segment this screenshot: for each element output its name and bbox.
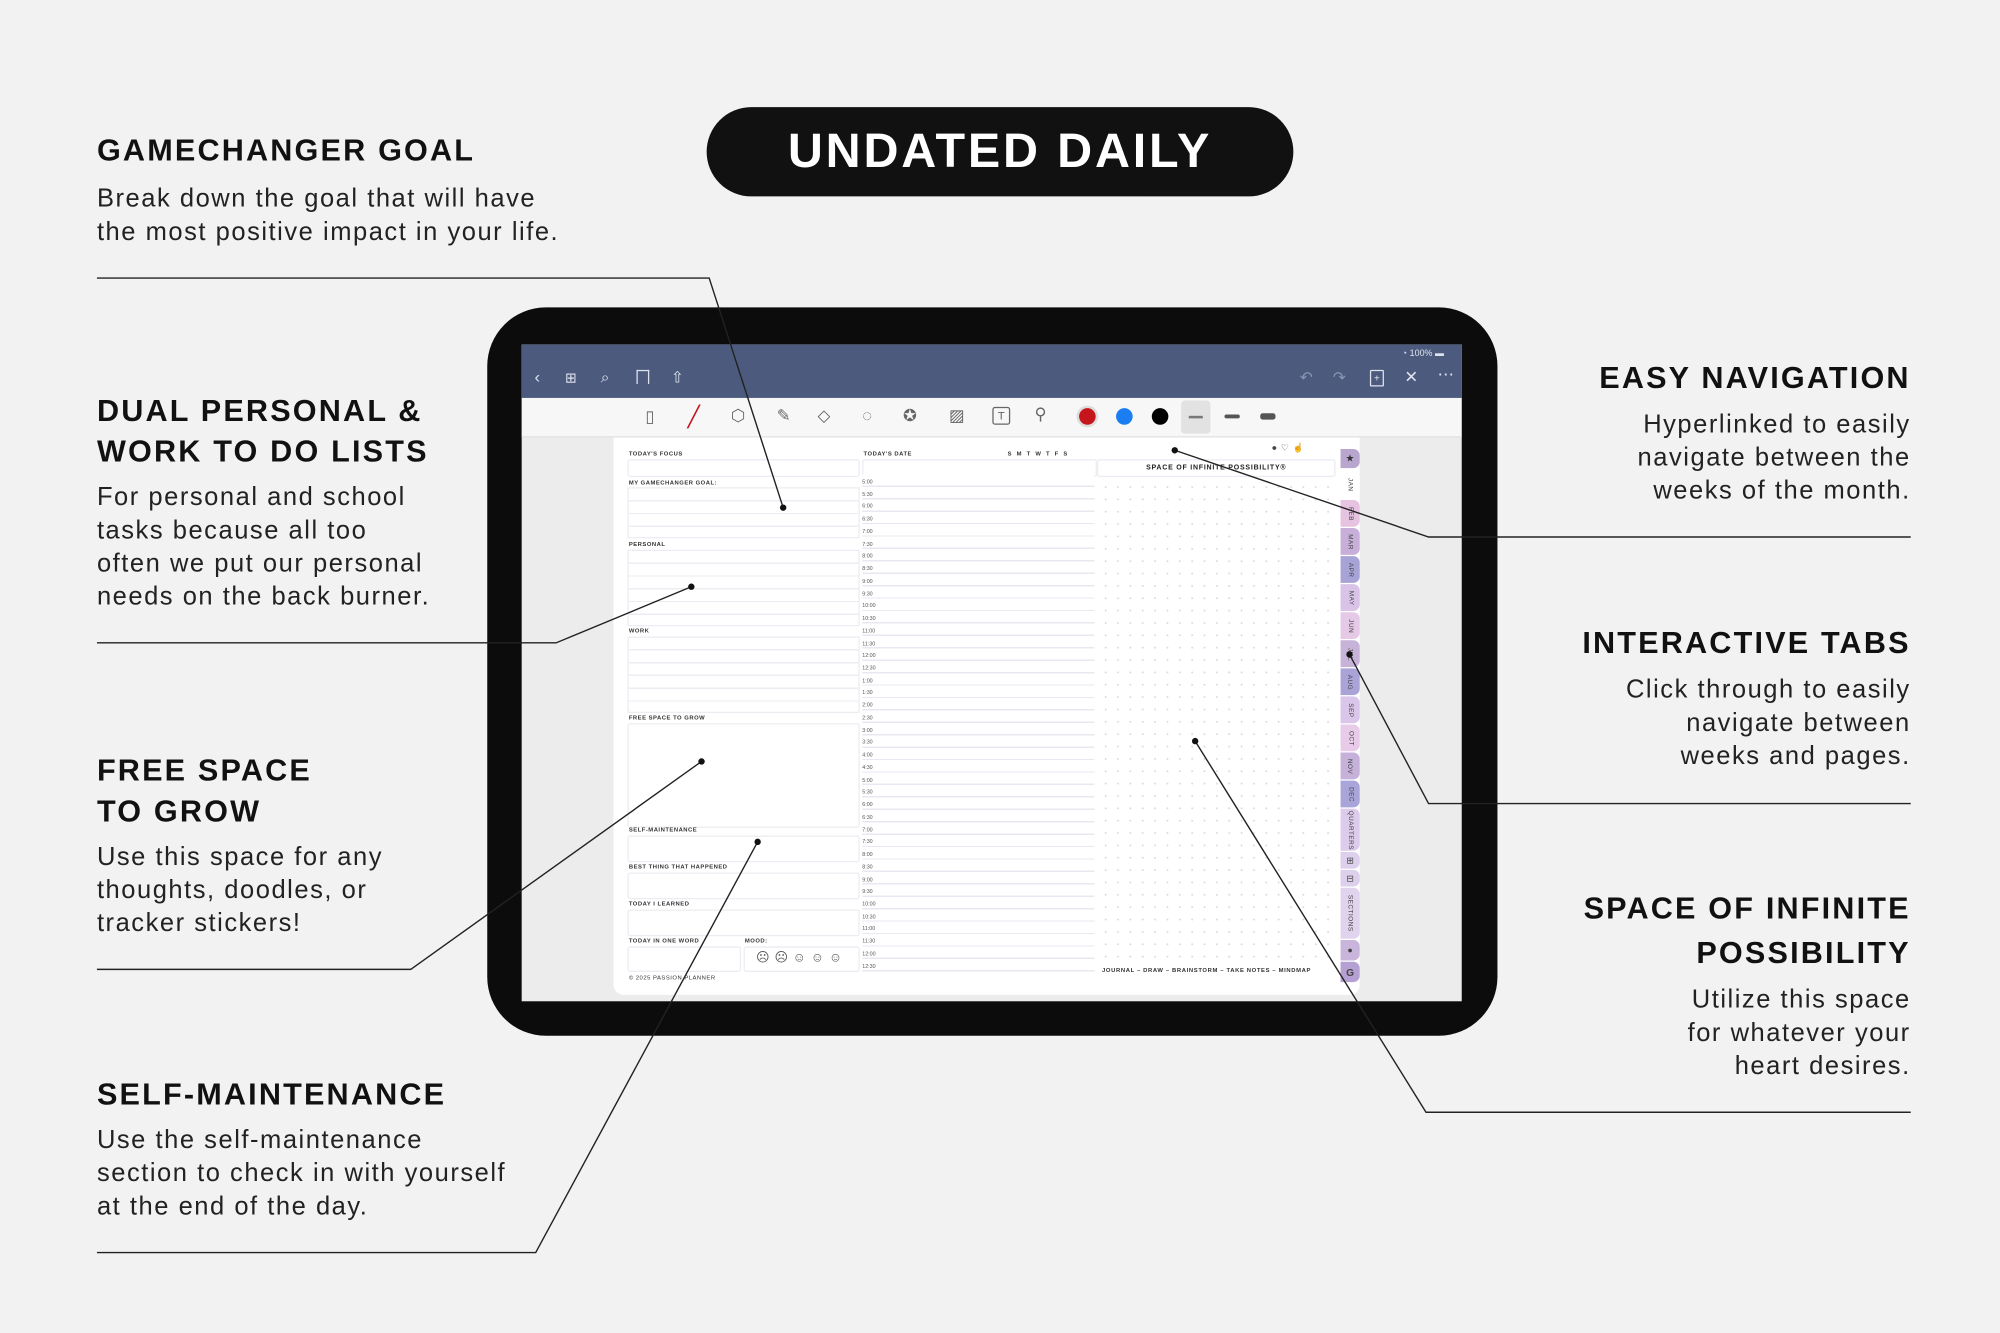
nav bar: ↶ <box>1300 369 1313 386</box>
text: space of infinite possibility: Utilize this space <box>1692 986 1911 1014</box>
timeline hours: 12:00 <box>862 652 876 659</box>
planner left column: MOOD: <box>745 937 768 944</box>
planner left column: TODAY IN ONE WORD <box>629 937 699 944</box>
timeline hours: 5:00 <box>862 478 873 485</box>
timeline hours: 6:30 <box>862 516 873 522</box>
planner left column: WORK <box>629 628 649 634</box>
text: easy navigation: EASY NAVIGATION <box>1599 361 1911 395</box>
timeline hours: 11:30 <box>862 938 875 944</box>
planner left column <box>628 450 860 981</box>
planner left column: TODAY I LEARNED <box>629 901 689 907</box>
screen <box>522 344 1462 1001</box>
text: dual personal & work: For personal and school <box>97 483 406 511</box>
timeline hours: 5:00 <box>862 776 873 783</box>
timeline hours: 12:30 <box>862 665 876 671</box>
toolbar: ⬡ <box>731 406 745 425</box>
tabs: ● <box>1347 946 1353 955</box>
nav bar: + <box>1374 372 1380 384</box>
tabs: QUARTERS <box>1346 810 1354 849</box>
timeline hours: 11:00 <box>862 627 875 634</box>
toolbar: ◌ <box>862 406 872 425</box>
text: interactive tabs: weeks and pages. <box>1681 742 1911 770</box>
text: free space to grow: FREE SPACE <box>97 754 312 788</box>
tabs: AUG <box>1346 674 1354 689</box>
text: dual personal & work: often we put our personal <box>97 550 423 578</box>
text: dual personal & work: DUAL PERSONAL & <box>97 394 423 429</box>
tabs: MAY <box>1346 590 1354 605</box>
timeline hours: 11:30 <box>862 640 875 646</box>
timeline hours: 12:00 <box>862 950 876 957</box>
timeline hours: 8:30 <box>862 863 873 870</box>
text: interactive tabs: navigate between <box>1686 709 1911 737</box>
timeline hours: 12:30 <box>862 963 876 969</box>
tabs: SECTIONS <box>1346 895 1354 932</box>
tabs: APR <box>1346 562 1354 577</box>
nav bar: ◔ 100% ▬ <box>1402 349 1444 358</box>
timeline hours: 10:00 <box>862 900 876 907</box>
timeline hours: 9:30 <box>862 590 873 596</box>
toolbar: ✎ <box>777 406 791 425</box>
timeline hours: 3:00 <box>862 727 873 733</box>
toolbar: ✪ <box>903 406 917 425</box>
text: easy navigation: Hyperlinked to easily <box>1643 411 1911 439</box>
text: self-maintenance: SELF-MAINTENANCE <box>97 1078 446 1112</box>
tabs: OCT <box>1346 730 1354 745</box>
timeline hours: 2:30 <box>862 714 873 721</box>
timeline hours: 6:00 <box>862 801 873 808</box>
tabs: DEC <box>1346 787 1354 802</box>
nav bar <box>522 344 1462 398</box>
text: free space to grow <box>97 754 383 937</box>
planner left column: SELF-MAINTENANCE <box>629 827 697 833</box>
tabs: NOV <box>1346 758 1354 774</box>
text: space of infinite possibility <box>1584 892 1911 1080</box>
tabs: SEP <box>1346 703 1354 717</box>
title pill: UNDATED DAILY <box>788 124 1212 178</box>
text: self-maintenance: at the end of the day. <box>97 1193 368 1221</box>
tabs: MAR <box>1346 534 1354 549</box>
timeline hours: 11:00 <box>862 925 875 932</box>
tabs: JAN <box>1346 478 1354 491</box>
timeline hours: 9:00 <box>862 578 873 584</box>
planner timeline <box>862 450 1097 972</box>
timeline hours: 6:30 <box>862 814 873 820</box>
text: interactive tabs: Click through to easily <box>1626 676 1911 704</box>
timeline hours <box>862 478 876 969</box>
planner left column: MY GAMECHANGER GOAL: <box>629 480 717 486</box>
timeline hours: 5:30 <box>862 789 873 795</box>
nav bar: ↷ <box>1333 369 1346 386</box>
timeline hours: 1:30 <box>862 689 873 696</box>
text: space of infinite possibility: for whatever your <box>1688 1019 1911 1047</box>
toolbar: T <box>998 409 1005 422</box>
text: interactive tabs <box>1582 626 1911 770</box>
timeline hours: 9:30 <box>862 888 873 894</box>
tabs <box>1340 449 1360 982</box>
timeline hours: 3:30 <box>862 739 873 745</box>
text: self-maintenance: Use the self-maintenance <box>97 1126 423 1154</box>
planner left column: ☹☹☺☺☺ <box>756 952 847 966</box>
timeline hours: 5:30 <box>862 491 873 497</box>
timeline hours: 1:00 <box>862 677 873 683</box>
text: free space to grow: TO GROW <box>97 795 261 829</box>
text: gamechanger goal: Break down the goal that will have <box>97 185 536 213</box>
text: dual personal & work: tasks because all too <box>97 517 367 545</box>
tabs: ⊞ <box>1346 857 1354 865</box>
space of infinite possibility dotted area: ●♡☝ <box>1272 444 1308 453</box>
nav bar: ⊞ <box>565 371 577 386</box>
space of infinite possibility dotted area: SPACE OF INFINITE POSSIBILITY® <box>1146 464 1286 472</box>
text: gamechanger goal: the most positive impact in your life. <box>97 218 559 246</box>
tabs: FEB <box>1346 506 1354 520</box>
timeline hours: 6:00 <box>862 503 873 510</box>
nav bar: ⇧ <box>671 369 684 386</box>
text: space of infinite possibility: heart desires. <box>1735 1052 1911 1080</box>
timeline hours: 4:30 <box>862 764 873 770</box>
timeline hours: 7:00 <box>862 528 873 534</box>
timeline hours: 8:00 <box>862 553 873 559</box>
space of infinite possibility dotted area <box>1097 442 1336 973</box>
tabs: JUL <box>1346 647 1354 660</box>
planner page <box>614 437 1360 995</box>
timeline hours: 9:00 <box>862 876 873 882</box>
timeline hours: 8:00 <box>862 851 873 857</box>
text: dual personal & work: WORK TO DO LISTS <box>97 435 429 469</box>
tabs: ⊟ <box>1346 874 1354 883</box>
timeline hours: 7:30 <box>862 540 873 547</box>
toolbar: ▯ <box>645 407 655 426</box>
text: free space to grow: Use this space for any <box>97 843 383 871</box>
text: gamechanger goal <box>97 134 559 246</box>
timeline hours: 2:00 <box>862 702 873 708</box>
text: easy navigation: navigate between the <box>1638 444 1911 472</box>
text: free space to grow: tracker stickers! <box>97 909 302 937</box>
text: interactive tabs: INTERACTIVE TABS <box>1582 626 1911 661</box>
text: self-maintenance: section to check in with yourself <box>97 1159 506 1187</box>
timeline hours: 7:00 <box>862 826 873 832</box>
text: free space to grow: thoughts, doodles, or <box>97 876 367 904</box>
timeline hours: 10:00 <box>862 602 876 609</box>
nav bar: ‹ <box>534 367 540 386</box>
planner left column: BEST THING THAT HAPPENED <box>629 864 728 870</box>
text: space of infinite possibility: SPACE OF INFINITE <box>1584 892 1911 926</box>
timeline hours: 8:30 <box>862 565 873 572</box>
nav bar: ⌕ <box>601 369 609 386</box>
toolbar: ⚲ <box>1034 404 1047 423</box>
text: easy navigation: weeks of the month. <box>1653 477 1911 505</box>
planner left column: FREE SPACE TO GROW <box>629 714 705 721</box>
title pill <box>707 107 1293 196</box>
text: dual personal & work <box>97 394 430 611</box>
planner left column: PERSONAL <box>629 541 665 547</box>
nav bar: ⋯ <box>1437 365 1454 384</box>
planner timeline: TODAY'S DATE <box>864 450 912 457</box>
tabs: ★ <box>1346 453 1355 464</box>
planner left column: © 2025 PASSION PLANNER <box>629 974 716 981</box>
text: space of infinite possibility: POSSIBILITY <box>1696 936 1911 971</box>
timeline hours: 7:30 <box>862 838 873 845</box>
planner left column: TODAY'S FOCUS <box>629 450 683 457</box>
text: dual personal & work: needs on the back burner. <box>97 583 430 611</box>
space of infinite possibility dotted area: JOURNAL – DRAW – BRAINSTORM – TAKE NOTES – MINDMAP <box>1102 967 1311 973</box>
planner timeline: SMTWTFS <box>1008 450 1072 457</box>
toolbar: ╱ <box>687 407 700 429</box>
text: easy navigation <box>1599 361 1911 505</box>
tabs: G <box>1346 966 1354 978</box>
tablet device <box>487 307 1497 1036</box>
toolbar: ▨ <box>949 406 965 425</box>
toolbar <box>522 398 1462 437</box>
tabs: JUN <box>1346 619 1354 633</box>
nav bar: ✕ <box>1404 367 1418 386</box>
toolbar: ◇ <box>818 406 830 425</box>
text: self-maintenance <box>97 1078 506 1221</box>
timeline hours: 10:30 <box>862 615 876 621</box>
timeline hours: 10:30 <box>862 913 876 919</box>
timeline hours: 4:00 <box>862 751 873 758</box>
text: gamechanger goal: GAMECHANGER GOAL <box>97 134 475 168</box>
